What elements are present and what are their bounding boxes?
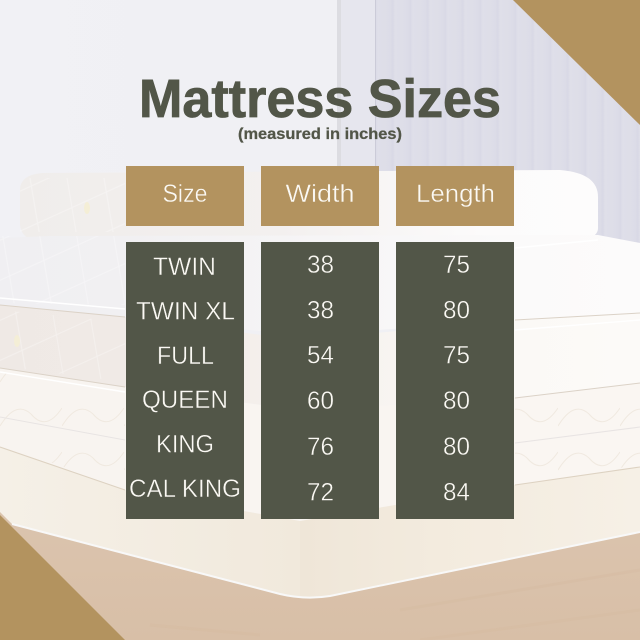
header: size: Size [162,180,208,208]
panel: width values: 38 [307,296,334,324]
header: size [126,166,244,226]
panel: size values: CAL KING [129,475,241,503]
panel: width values [261,242,379,519]
panel: length values: 80 [443,296,470,324]
panel: width values: 60 [307,387,334,415]
panel: length values: 80 [443,387,470,415]
panel: width values: 38 [307,251,334,279]
mattress layers [20,170,598,243]
panel: size values: TWIN [153,253,216,281]
panel: width values: 72 [307,478,334,506]
column: length [396,166,514,519]
panel: length values: 80 [443,433,470,461]
mattress texture [0,236,125,305]
panel: width values: 54 [307,342,334,370]
panel: length values: 75 [443,251,470,279]
panel: size values: QUEEN [142,386,228,414]
header: width [261,166,379,226]
title: Mattress Sizes [139,69,501,129]
panel: size values: FULL [157,342,214,370]
header: width: Width [286,180,354,208]
column: size [126,166,244,519]
panel: size values: KING [156,430,214,458]
subtitle: (measured in inches) [238,126,402,143]
panel: length values: 75 [443,342,470,370]
panel: size values: TWIN XL [136,298,235,326]
header: length: Length [416,180,495,208]
panel: length values [396,242,514,519]
panel: width values: 76 [307,433,334,461]
header: length [396,166,514,226]
corner triangle: bottom left [0,515,125,640]
column: width [261,166,379,519]
panel: length values: 84 [443,478,470,506]
corner triangle: top right [513,0,640,125]
mattress seams [0,305,640,398]
panel: size values [126,242,244,519]
